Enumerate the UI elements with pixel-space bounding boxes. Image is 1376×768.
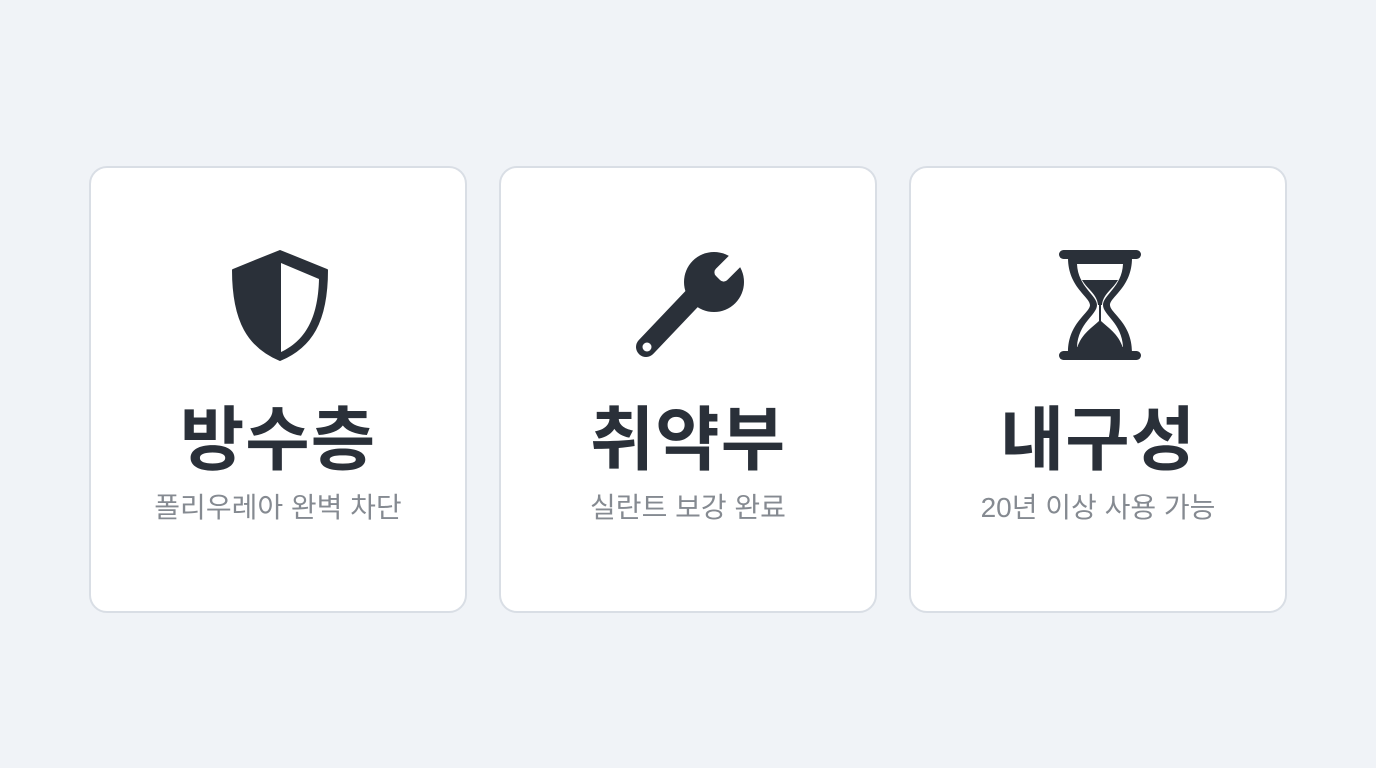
text block: 실란트 보강 완료 [590, 492, 786, 523]
panel: waterproof layer [89, 166, 467, 613]
panel: weak points [499, 166, 877, 613]
heading: 취약부 [590, 401, 786, 479]
icon: hourglass [1059, 250, 1141, 360]
text block: 20년 이상 사용 가능 [981, 492, 1215, 523]
icon: wrench [636, 252, 744, 357]
text block: 폴리우레아 완벽 차단 [154, 492, 402, 523]
heading: 내구성 [1000, 401, 1196, 479]
icon: shield [232, 250, 328, 361]
heading: 방수층 [180, 401, 376, 479]
panel: durability [909, 166, 1287, 613]
